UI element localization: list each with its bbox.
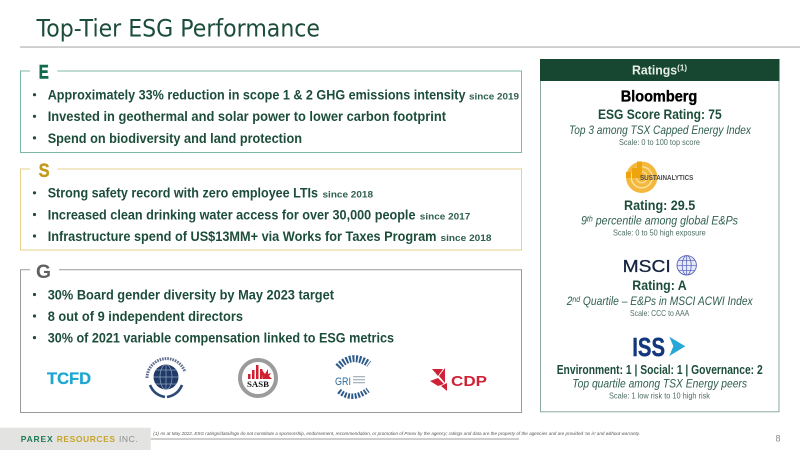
bullet: biodiversity: Spend on biodiversity and land protection	[48, 131, 302, 146]
rating: ISS	[557, 332, 763, 400]
bullet: infrastructure: Infrastructure spend of US$13MM+ via Works for Taxes Program	[48, 229, 436, 244]
panel: ratings	[540, 59, 780, 412]
logo: SASB: SASB	[247, 380, 270, 389]
rating: ISS: Scale: 1 low risk to 10 high risk	[609, 390, 711, 400]
footer brand band: INC.	[119, 434, 138, 444]
rating: Sustainalytics: th	[587, 215, 593, 224]
bullet: geothermal: Invested in geothermal and solar power to lower carbon footprint	[48, 109, 446, 124]
rating: MSCI: MSCI	[623, 256, 671, 276]
rating: MSCI: Quartile – E&Ps in MSCI ACWI Index	[580, 294, 754, 308]
rating: Bloomberg: ESG Score Rating: 75	[598, 106, 722, 122]
title: Top-Tier ESG Performance	[36, 15, 320, 43]
bullet: emissions: Approximately 33% reduction in scope 1 & 2 GHG emissions intensity	[48, 88, 466, 103]
footnote: (1) As at May 2022. ESG ratings/data/logo do not constitute a sponsorship, endorsement, recommendation, or promotion of Parex by the agency; ratings and data are the property of the agencies and are provided ‘as is’ and without warranty.	[153, 431, 640, 436]
rating: Sustainalytics: SUSTAINALYTICS	[640, 173, 693, 182]
footer brand band: RESOURCES	[57, 434, 115, 444]
rating: Bloomberg: Top 3 among TSX Capped Energy Index	[569, 123, 752, 137]
rating: MSCI: nd	[572, 295, 581, 304]
rating: Bloomberg	[569, 89, 752, 147]
rating: Sustainalytics: Scale: 0 to 50 high exposure	[613, 227, 706, 237]
ratings header	[540, 59, 780, 81]
bullet: infrastructure: since 2018	[440, 233, 492, 244]
logo: CDP	[430, 368, 487, 391]
panel: environmental	[20, 61, 522, 152]
rating: ISS: Environment: 1 | Social: 1 | Governance: 2	[557, 363, 763, 377]
ratings header: Ratings	[632, 62, 680, 78]
rating: MSCI	[566, 256, 754, 318]
logo: CDP: CDP	[451, 373, 487, 390]
logo: TCFD: TCFD	[47, 369, 91, 388]
rating: Bloomberg: Bloomberg	[621, 89, 697, 106]
rating: Sustainalytics: Rating: 29.5	[624, 197, 695, 213]
bullet: water: Increased clean drinking water access for over 30,000 people	[48, 207, 416, 222]
rating: MSCI: 2	[567, 294, 573, 308]
rating: Sustainalytics	[581, 162, 738, 237]
rating: MSCI: Scale: CCC to AAA	[630, 308, 690, 318]
bullet: water: since 2017	[420, 211, 470, 222]
logo: UN Global Compact	[147, 359, 185, 397]
rating: Bloomberg: Scale: 0 to 100 top score	[619, 137, 700, 147]
rating: ISS: ISS	[632, 332, 665, 362]
bullet: emissions: since 2019	[469, 92, 519, 103]
bullet: safety: Strong safety record with zero employee LTIs	[48, 186, 318, 201]
bullet: compensation: 30% of 2021 variable compensation linked to ESG metrics	[48, 330, 394, 345]
logo: GRI: GRI	[335, 376, 351, 388]
page number: 8	[776, 434, 781, 444]
logo: SASB	[240, 360, 276, 396]
footer brand band: PAREX	[21, 434, 53, 444]
footer brand band	[0, 428, 151, 450]
heading: G: G	[36, 261, 51, 283]
heading: E: E	[39, 61, 49, 83]
bullet: safety: since 2018	[322, 190, 373, 201]
rating: Sustainalytics: percentile among global E&Ps	[593, 214, 738, 228]
bullet: directors: 8 out of 9 independent directors	[48, 309, 243, 324]
bullet: board diversity: 30% Board gender diversity by May 2023 target	[48, 287, 334, 302]
panel: governance	[20, 261, 522, 412]
rating: Sustainalytics: 9	[581, 214, 588, 228]
logo: GRI	[335, 359, 369, 396]
rating: ISS: Top quartile among TSX Energy peers	[572, 376, 747, 390]
panel: social	[20, 160, 522, 250]
ratings header: (1)	[677, 62, 687, 72]
heading: S: S	[39, 160, 50, 182]
rating: MSCI: Rating: A	[632, 277, 687, 293]
